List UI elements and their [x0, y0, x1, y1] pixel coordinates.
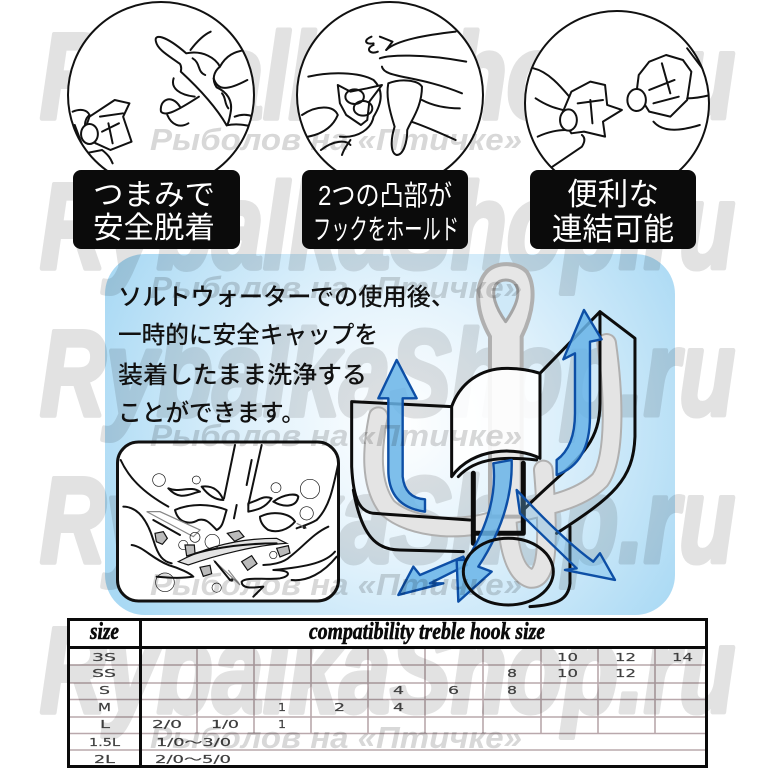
table values: 1 — [278, 701, 286, 714]
watermark: small shop name rows: Рыболов на «Птичке» — [150, 720, 522, 755]
table values: 14 — [672, 651, 693, 664]
table values: 2/0 — [152, 718, 182, 731]
table header: compatibility treble hook size — [309, 619, 545, 645]
table row labels: S — [99, 684, 110, 697]
table row labels: 1.5L — [89, 736, 121, 749]
treble hook — [374, 264, 612, 578]
table values: 4 — [393, 684, 404, 697]
label: convenient connection possible: 便利な — [567, 177, 659, 212]
table values — [152, 651, 693, 766]
blue water flow arrows — [378, 310, 615, 602]
panel: saltwater rinse — [105, 254, 675, 615]
watermark: small shop name rows: Рыболов на «Птичке» — [150, 418, 522, 453]
table row labels: 2L — [94, 753, 116, 766]
panel text: rinse explanation: ソルトウォーターでの使用後、 — [118, 284, 455, 311]
panel text: rinse explanation: ことができます。 — [118, 400, 305, 427]
table row labels — [89, 651, 121, 766]
panel text: rinse explanation — [118, 284, 455, 427]
label: pinch for safe removal — [73, 170, 240, 249]
table values: 2/0～5/0 — [155, 753, 231, 766]
label: pinch for safe removal: つまみで — [93, 179, 215, 212]
table row labels: SS — [92, 667, 116, 680]
cap base ring — [463, 538, 553, 605]
table values: 10 — [557, 651, 578, 664]
table values: 10 — [557, 667, 578, 680]
table: compatibility treble hook size — [68, 619, 707, 767]
watermark: small shop name rows: Рыболов на «Птичке» — [150, 270, 522, 305]
table row labels: M — [98, 701, 111, 714]
label: pinch for safe removal: 安全脱着 — [93, 212, 215, 245]
watermark: small shop name rows: Рыболов на «Птичке» — [150, 122, 522, 157]
illustration: washing the lure under running water — [118, 442, 338, 601]
label: convenient connection possible — [530, 170, 696, 249]
table row and column lines — [70, 648, 706, 750]
table values: 1/0～3/0 — [156, 736, 231, 749]
table values: 12 — [615, 651, 636, 664]
table values: 8 — [507, 684, 517, 697]
panel text: rinse explanation: 一時的に安全キャップを — [118, 322, 378, 349]
safety cap outline — [352, 312, 635, 607]
illustration: pinching the cap to remove it — [68, 2, 254, 188]
label: two bumps hold the hook: フックをホールド — [313, 214, 459, 245]
table values: 8 — [507, 667, 517, 680]
label: convenient connection possible: 連結可能 — [552, 212, 674, 247]
table values: 6 — [448, 684, 459, 697]
watermark: small shop name rows: Рыболов на «Птичке» — [150, 567, 522, 602]
table values: 1/0 — [211, 718, 239, 731]
panel text: rinse explanation: 装着したまま洗浄する — [118, 362, 367, 389]
table header — [89, 619, 545, 645]
illustration: treble hook in cap with water flow arrows — [352, 264, 635, 607]
illustration: two bumps hold the hook — [297, 2, 483, 188]
table values: 12 — [615, 667, 636, 680]
illustration: connecting two caps — [524, 10, 710, 170]
table values: 2 — [334, 701, 345, 714]
label: two bumps hold the hook: 2つの凸部が — [318, 180, 452, 211]
label: two bumps hold the hook — [302, 170, 468, 249]
table values: 1 — [278, 718, 286, 731]
table row labels: 3S — [92, 651, 116, 664]
table values: 4 — [393, 701, 404, 714]
watermark: small shop name rows — [150, 122, 522, 755]
table row labels: L — [100, 718, 111, 731]
table header: size — [89, 619, 119, 645]
